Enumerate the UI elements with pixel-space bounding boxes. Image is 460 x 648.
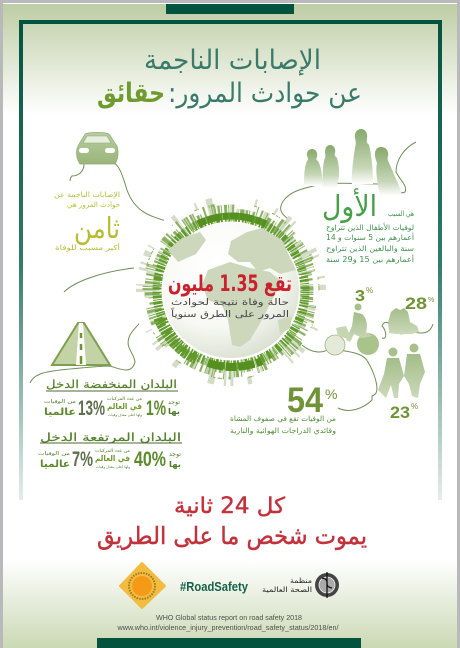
icon: road safety diamond xyxy=(120,563,165,608)
text: eighth leading cause xyxy=(54,191,120,252)
callout: 54% xyxy=(230,381,337,435)
text: leading cause for young people: الأول xyxy=(322,187,377,223)
text: leading cause for young people: هي السبب xyxy=(388,210,414,218)
panel: low-income countries: عالميا xyxy=(44,407,76,418)
text: leading cause for young people: أعمارهم بين 15 و29 سنة xyxy=(326,254,414,264)
icon: children and young adults xyxy=(304,129,402,196)
icon: motorcyclists 28% xyxy=(388,294,434,334)
icon: car xyxy=(77,132,118,164)
panel: low-income countries: 1% xyxy=(146,397,166,420)
panel: high-income countries: ولها أعلى معدل وفيات xyxy=(96,464,130,469)
callout: 1.35 million deaths: المرور على الطرق سنوياً xyxy=(170,307,289,320)
frame xyxy=(19,4,442,500)
callout: every 24 seconds xyxy=(97,494,367,550)
globe with city ring xyxy=(139,199,323,383)
WHO name xyxy=(262,577,312,594)
panel: high-income countries: 7% xyxy=(72,448,93,471)
icon: pedestrians 23% xyxy=(378,344,425,422)
connecting wires xyxy=(30,142,433,410)
panel: low-income countries: البلدان المنخفضة الدخل xyxy=(46,378,177,391)
source citation xyxy=(117,613,339,632)
callout: every 24 seconds: يموت شخص ما على الطريق xyxy=(97,522,367,550)
title xyxy=(97,45,362,109)
icon: motorcyclists 28%: 28 xyxy=(405,294,427,313)
panel: low-income countries: في العالم xyxy=(107,402,142,411)
text: leading cause for young people xyxy=(322,187,414,264)
callout: 54%: وقائدي الدراجات الهوائية والنارية xyxy=(230,427,336,435)
WHO name: الصحة العالمية xyxy=(262,586,312,594)
source citation: www.who.int/violence_injury_prevention/road_safety_status/2018/en/ xyxy=(117,623,339,632)
text: eighth leading cause: أكبر مسبب للوفاة xyxy=(55,243,120,252)
panel: high-income countries xyxy=(38,431,182,471)
text: leading cause for young people: أعمارهم بين 5 سنوات و 14 xyxy=(326,232,414,242)
callout: every 24 seconds: كل 24 ثانية xyxy=(174,494,286,519)
panel: high-income countries: البلدان المرتفعة الدخل xyxy=(40,431,181,444)
icon: motorcyclists 28%: % xyxy=(428,297,434,304)
icon: pedestrians 23%: % xyxy=(411,402,418,411)
WHO name: منظمة xyxy=(290,577,312,585)
icon: cyclist 3%: 3 xyxy=(355,288,365,305)
icon: WHO emblem xyxy=(315,572,339,598)
callout: 1.35 million deaths: تقع 1.35 مليون xyxy=(168,272,292,297)
panel: low-income countries: 13% xyxy=(78,397,105,420)
hashtag: #RoadSafety xyxy=(180,579,249,594)
bottom bar xyxy=(97,638,361,648)
callout: 54%: % xyxy=(325,386,337,402)
panel: high-income countries: عالميا xyxy=(40,459,70,470)
panel: low-income countries: من عدد المركبات xyxy=(107,396,143,402)
panel: high-income countries: من عدد المركبات xyxy=(95,448,131,454)
icon: road xyxy=(52,323,110,365)
panel: high-income countries: 40% xyxy=(134,448,166,471)
icon: pedestrians 23%: 23 xyxy=(390,403,410,422)
title: عن حوادث المرور: xyxy=(168,78,362,109)
text: leading cause for young people: سنة والبالغين الذين تتراوح xyxy=(326,244,414,253)
panel: low-income countries: توجد xyxy=(168,399,180,406)
panel: low-income countries xyxy=(44,378,180,420)
panel: high-income countries: في العالم xyxy=(95,454,130,463)
icon: cyclist 3%: % xyxy=(366,286,373,295)
text: eighth leading cause: حوادث المرور هي xyxy=(67,201,120,209)
callout: 1.35 million deaths xyxy=(168,272,292,320)
panel: low-income countries: من الوفيات xyxy=(44,399,76,405)
panel: low-income countries: ولها أعلى معدل وفيات xyxy=(108,412,142,417)
callout: 54%: من الوفيات تقع في صفوف المشاة xyxy=(230,415,336,423)
callout: 1.35 million deaths: حالة وفاة نتيجة لحوادث xyxy=(171,298,289,308)
source citation: WHO Global status report on road safety 2018 xyxy=(156,613,302,622)
panel: high-income countries: بها xyxy=(169,460,181,469)
text: eighth leading cause: ثامن xyxy=(74,211,120,245)
panel: high-income countries: من الوفيات xyxy=(38,451,70,457)
panel: low-income countries: بها xyxy=(168,407,180,416)
title: حقائق xyxy=(97,78,165,109)
text: eighth leading cause: الإصابات الناجمة عن xyxy=(54,191,120,199)
title: الإصابات الناجمة xyxy=(144,45,321,76)
icon: cyclist 3% xyxy=(325,286,379,355)
text: leading cause for young people: لوفيات الأطفال الذين تتراوح xyxy=(326,222,414,232)
callout: 54%: 54 xyxy=(287,381,323,420)
panel: high-income countries: توجد xyxy=(169,451,181,458)
